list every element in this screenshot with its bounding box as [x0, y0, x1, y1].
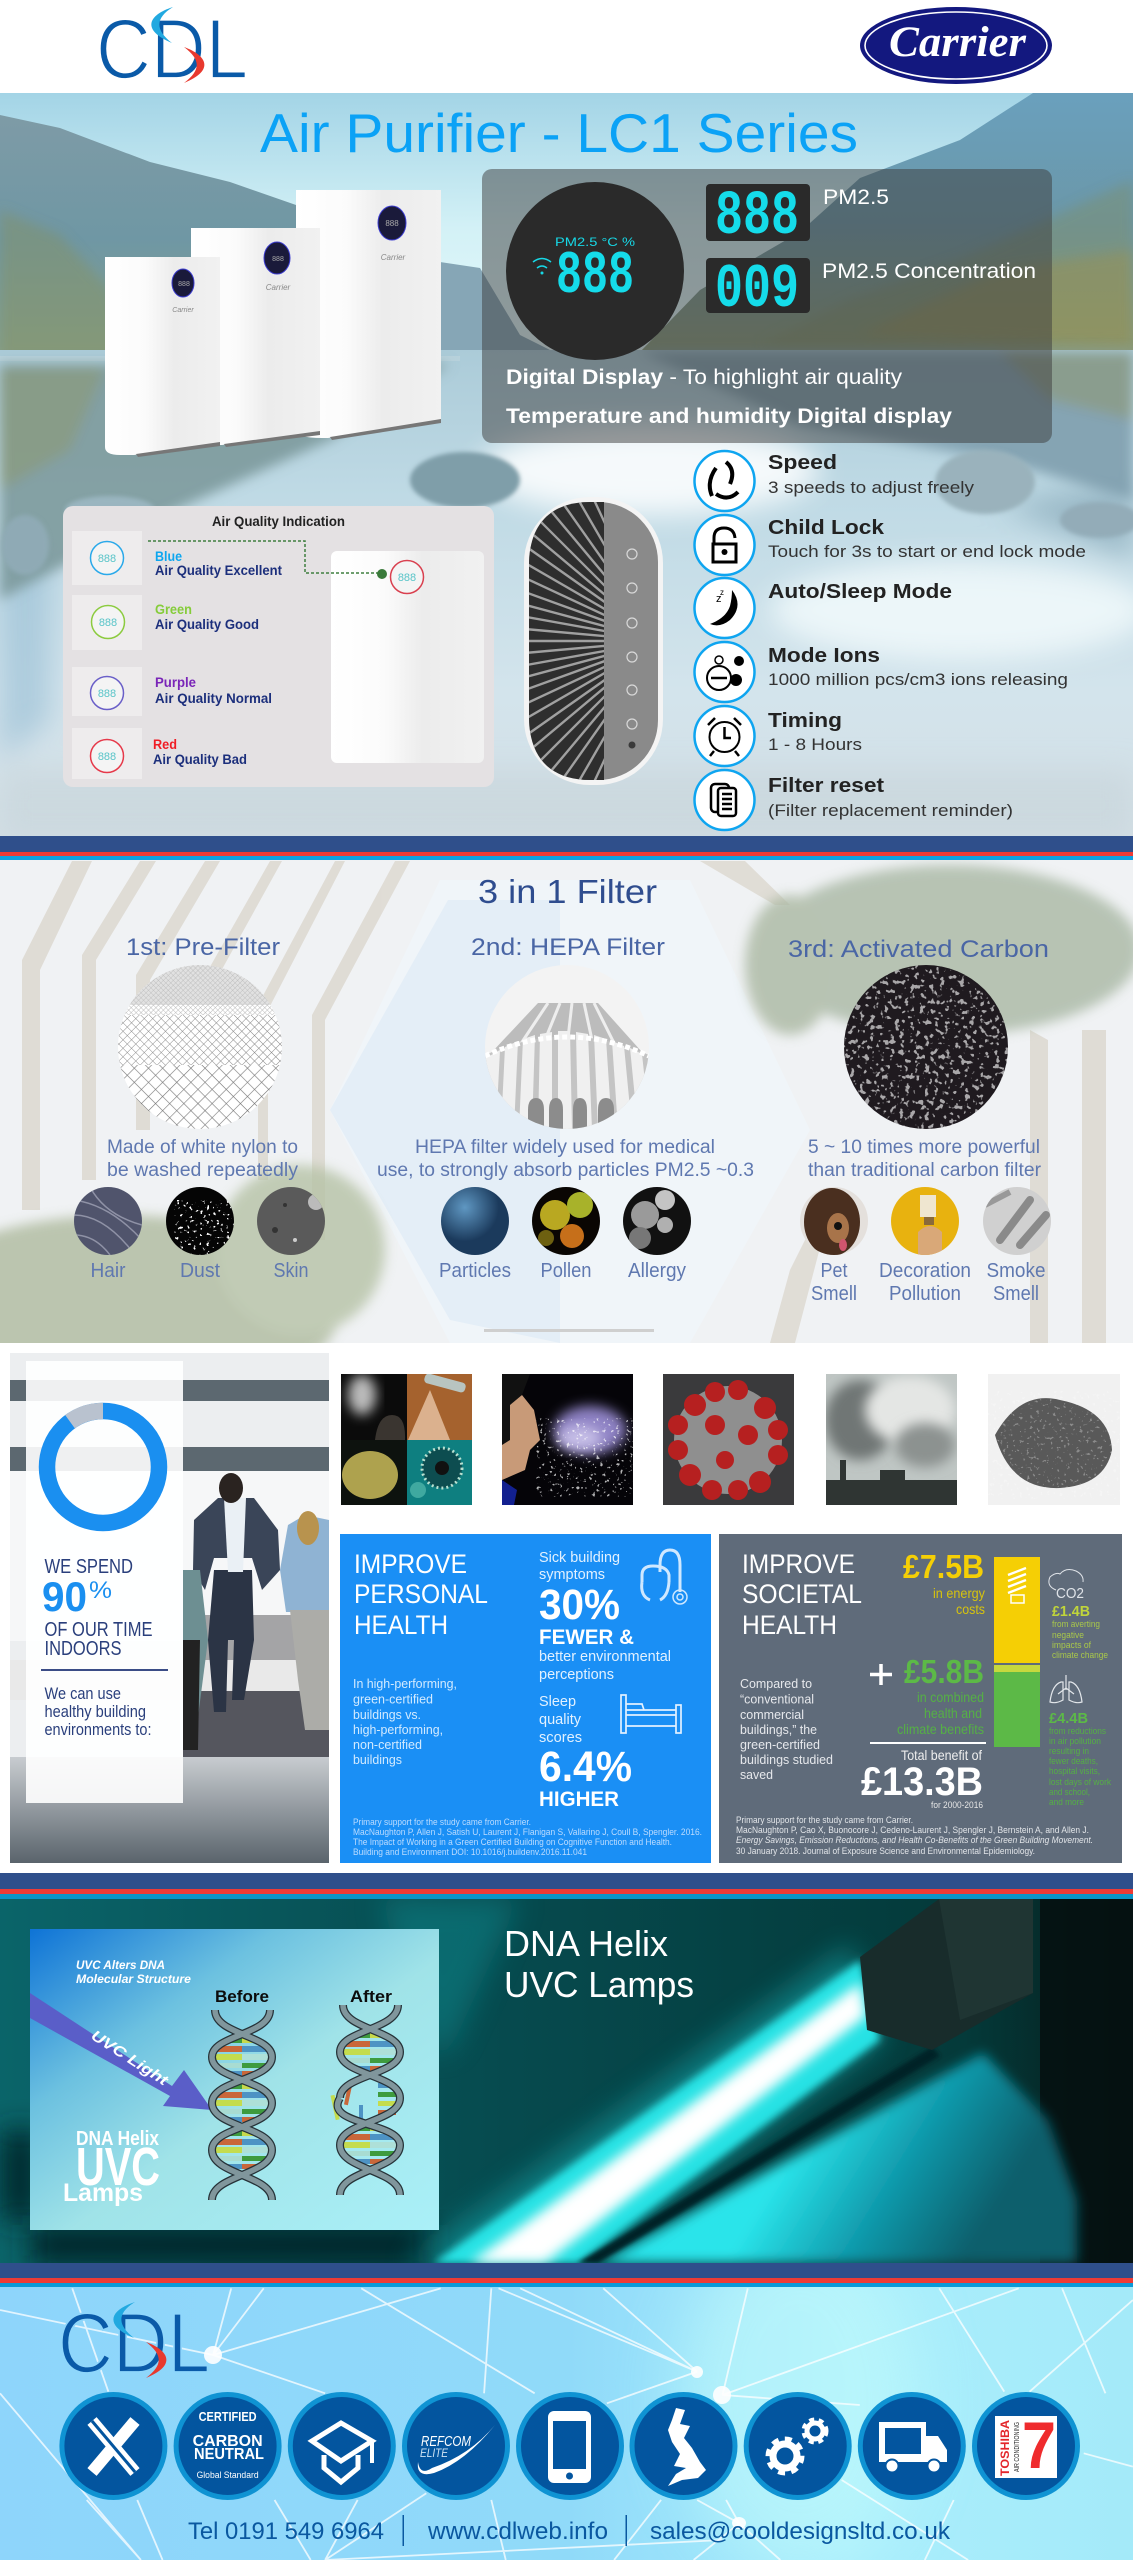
panel: improve societal health: in combined — [917, 1689, 984, 1705]
panel: improve societal health: resulting in — [1049, 1746, 1089, 1757]
icon circle: graduation cap — [288, 2392, 396, 2500]
feature: auto sleep mode — [694, 578, 952, 638]
header: Carrier logo — [860, 7, 1052, 84]
panel: improve societal health: impacts of — [1052, 1640, 1091, 1651]
panel: improve personal health: Sick building — [539, 1549, 620, 1566]
indicator: red — [90, 740, 124, 772]
feature: mode ions: 1000 million pcs/cm3 ions releasing — [768, 670, 1068, 689]
display circle: PM2.5 °C % — [555, 235, 635, 249]
panel: improve societal health: for 2000-2016 — [931, 1800, 983, 1811]
product image: three purifiers: 888 — [272, 256, 284, 263]
column: activated carbon: Pollution — [889, 1283, 961, 1305]
panel: improve societal health: £1.4B — [1052, 1604, 1090, 1620]
panel: footer background — [0, 2230, 1133, 2560]
indicator: red: 888 — [98, 751, 116, 763]
image: hair — [74, 1187, 142, 1255]
footer: CDL logo: CDL — [58, 2296, 210, 2390]
panel: improve societal health: Energy Savings, Emission Reductions, and Health Co-Benefits of the Green Building Movement. — [736, 1835, 1093, 1846]
panel: improve personal health — [340, 1534, 711, 1863]
panel: improve personal health: high-performing, — [353, 1723, 443, 1737]
panel: improve personal health: PERSONAL — [354, 1579, 488, 1609]
panel: improve personal health: FEWER & — [539, 1626, 634, 1649]
panel: improve personal health: buildings vs. — [353, 1708, 421, 1722]
column: pre-filter: Skin — [274, 1260, 308, 1282]
panel: improve personal health: Sleep — [539, 1693, 576, 1710]
feature: auto sleep mode: Auto/Sleep Mode — [768, 580, 952, 603]
heading: DNA Helix UVC Lamps: UVC Lamps — [504, 1964, 694, 2005]
small purifier with indicator — [148, 541, 484, 763]
icon circle: certified carbon neutral — [174, 2392, 282, 2500]
text: we spend 90 percent — [41, 1556, 168, 1739]
plus sign — [870, 1664, 892, 1685]
panel: improve personal health: 30% — [539, 1581, 620, 1629]
column: HEPA filter: 2nd: HEPA Filter — [471, 934, 665, 961]
photo: people walking indoors — [10, 1353, 329, 1863]
text: we spend 90 percent: environments to: — [44, 1720, 152, 1739]
panel: digital display — [482, 169, 1052, 443]
icon circle: UK map — [630, 2392, 738, 2500]
panel: improve personal health: symptoms — [539, 1566, 605, 1583]
panel: improve personal health: better environmental — [539, 1648, 671, 1665]
column: activated carbon: 3rd: Activated Carbon — [788, 936, 1049, 963]
DNA helix: after — [331, 2005, 400, 2195]
panel: improve societal health: climate benefits — [897, 1721, 984, 1737]
column: activated carbon: 5 ~ 10 times more powerful — [808, 1137, 1040, 1158]
panel: improve personal health: Building and Environment DOI: 10.1016/j.buildenv.2016.11.041 — [353, 1847, 587, 1858]
indicator: blue — [90, 542, 124, 574]
footer: contact details — [188, 2515, 951, 2546]
text: we spend 90 percent: 90 — [42, 1573, 87, 1620]
header: Carrier logo: Carrier — [889, 19, 1027, 66]
arrow: UVC light: UVC Light — [88, 2027, 172, 2090]
diagram: UVC alters DNA: After — [350, 1987, 392, 2006]
icon circle: certified carbon neutral: CARBON — [193, 2433, 263, 2450]
indicator: green — [92, 606, 124, 638]
product image: three purifiers: Carrier — [172, 307, 194, 314]
image: skin — [257, 1187, 325, 1255]
panel: improve societal health: negative — [1052, 1630, 1084, 1641]
diagram: UVC alters DNA: DNA Helix — [76, 2128, 159, 2150]
panel: air quality indication: Green — [155, 602, 192, 617]
icon circle: REFCOM Elite — [402, 2392, 510, 2500]
panel: improve societal health: SOCIETAL — [742, 1579, 862, 1609]
product image: three purifiers: 888 — [385, 219, 399, 228]
panel: digital display: Digital Display - To highlight air quality — [506, 365, 902, 389]
icon circle: certified carbon neutral: Global Standard — [197, 2470, 259, 2480]
feature: child lock: Touch for 3s to start or end lock mode — [768, 542, 1086, 561]
icon circle: certified carbon neutral: CERTIFIED — [199, 2409, 257, 2424]
icon circle: certified carbon neutral: NEUTRAL — [194, 2446, 264, 2463]
icon: bed — [621, 1695, 681, 1733]
image: pleats — [485, 965, 650, 1129]
column: pre-filter: 1st: Pre-Filter — [126, 934, 280, 961]
image: carbon granules — [844, 965, 1008, 1129]
panel: improve personal health: In high-performing, — [353, 1677, 457, 1691]
column: pre-filter: Hair — [90, 1260, 126, 1282]
panel: improve societal health: hospital visits, — [1049, 1766, 1100, 1777]
column: activated carbon: Decoration — [879, 1260, 971, 1282]
column: HEPA filter: Allergy — [628, 1260, 686, 1282]
icon circle: smartphone — [516, 2392, 624, 2500]
icon circle: delivery truck — [858, 2392, 966, 2500]
feature: child lock — [694, 515, 1086, 575]
panel: UVC lamp background — [0, 1899, 1133, 2265]
photo: coronavirus — [663, 1374, 794, 1505]
text: we spend 90 percent: INDOORS — [44, 1638, 122, 1660]
panel: improve societal health: and more — [1049, 1797, 1084, 1808]
diagram: UVC alters DNA — [30, 1929, 439, 2230]
panel: improve societal health: £4.4B — [1049, 1711, 1088, 1727]
panel: improve societal health — [719, 1534, 1122, 1863]
feature: filter reset: (Filter replacement reminder) — [768, 801, 1013, 820]
icon circle: tools — [59, 2392, 167, 2500]
indicator: purple — [90, 676, 124, 710]
panel: improve societal health: in energy — [933, 1585, 985, 1601]
panel: improve personal health: 6.4% — [539, 1743, 632, 1791]
feature: timing: 1 - 8 Hours — [768, 735, 862, 754]
heading: 3 in 1 filter: 3 in 1 Filter — [478, 873, 657, 910]
column: activated carbon: Pet — [820, 1260, 848, 1282]
panel: 3 in 1 filter background — [0, 860, 1133, 1343]
text: we spend 90 percent: OF OUR TIME — [44, 1619, 152, 1641]
diagram: UVC alters DNA: Before — [215, 1987, 269, 2006]
panel: improve societal health: lost days of work — [1049, 1777, 1111, 1788]
icon: CO2 cloud — [1049, 1570, 1084, 1602]
icon: lungs — [1050, 1675, 1082, 1703]
DNA helix: before — [212, 2010, 272, 2200]
title: Air Purifier - LC1 Series — [260, 102, 858, 164]
panel: air quality indication — [63, 506, 494, 787]
column: pre-filter: Made of white nylon to — [107, 1137, 298, 1158]
panel: air quality indication: Air Quality Excellent — [155, 563, 282, 578]
panel: improve societal health: costs — [956, 1601, 985, 1617]
feature: speed: Speed — [768, 451, 837, 474]
photo: factory smoke — [825, 1374, 957, 1505]
panel: air quality indication: Red — [153, 737, 177, 752]
panel: digital display: Temperature and humidity Digital display — [506, 404, 952, 428]
panel: air quality indication: Air Quality Normal — [155, 691, 272, 706]
footer: contact details: Tel 0191 549 6964 — [188, 2518, 384, 2545]
icon: stethoscope — [642, 1550, 687, 1604]
panel: improve personal health: HEALTH — [354, 1610, 448, 1640]
panel: air quality indication: Purple — [155, 675, 196, 690]
panel: improve societal health: buildings studied — [740, 1752, 833, 1767]
feature: speed — [694, 451, 975, 511]
column: HEPA filter: use, to strongly absorb particles PM2.5 ~0.3 — [377, 1160, 754, 1181]
column: activated carbon — [788, 936, 1051, 1305]
panel: improve societal health: IMPROVE — [742, 1549, 855, 1579]
column: HEPA filter: HEPA filter widely used for medical — [415, 1137, 715, 1158]
image: smoke — [983, 1187, 1051, 1255]
product image: three purifiers: Carrier — [266, 283, 291, 292]
panel: improve societal health: £7.5B — [903, 1548, 984, 1585]
panel: improve personal health: quality — [539, 1711, 581, 1728]
icon: CO2 cloud: CO2 — [1056, 1585, 1084, 1602]
panel: improve societal health: and school, — [1049, 1787, 1090, 1798]
panel: improve societal health: green-certified — [740, 1737, 820, 1752]
feature: auto sleep mode: z — [720, 588, 724, 597]
panel: improve personal health: HIGHER — [539, 1788, 619, 1811]
panel: air quality indication: Air Quality Good — [155, 617, 259, 632]
text: we spend 90 percent: We can use — [44, 1684, 121, 1703]
column: pre-filter: be washed repeatedly — [107, 1160, 299, 1181]
icon circle: Toshiba 7 year warranty: TOSHIBA — [998, 2420, 1012, 2476]
photo: dust pile — [988, 1374, 1120, 1505]
image: mesh — [118, 965, 282, 1130]
diagram: UVC alters DNA: Lamps — [63, 2179, 143, 2207]
panel: improve personal health: buildings — [353, 1753, 402, 1767]
heading: DNA Helix UVC Lamps: DNA Helix — [504, 1923, 668, 1964]
feature: auto sleep mode: z — [716, 593, 722, 605]
feature: speed: 3 speeds to adjust freely — [768, 478, 975, 497]
feature: mode ions: Mode Ions — [768, 644, 880, 667]
product image: three purifiers — [105, 190, 441, 457]
panel: improve personal health: non-certified — [353, 1738, 422, 1752]
panel: improve societal health: from reductions — [1049, 1726, 1106, 1737]
column: activated carbon: Smell — [993, 1283, 1039, 1305]
image: decoration — [891, 1187, 959, 1255]
divider band — [0, 2263, 1133, 2288]
photo: steam, shower, mite, virus — [341, 1373, 472, 1505]
icon circle: gears — [744, 2392, 852, 2500]
header: CDL logo: CDL — [96, 2, 248, 96]
stacked bar — [994, 1557, 1040, 1747]
panel: improve societal health: HEALTH — [742, 1610, 837, 1640]
photo: sneeze — [502, 1374, 633, 1505]
panel: air quality indication: Blue — [155, 549, 182, 564]
footer: contact details: www.cdlweb.info — [427, 2518, 608, 2545]
column: HEPA filter — [377, 934, 754, 1282]
column: activated carbon: Smoke — [986, 1260, 1046, 1282]
panel: improve societal health: £13.3B — [861, 1760, 983, 1804]
icon circle: Toshiba 7 year warranty: AIR CONDITIONING — [1014, 2422, 1021, 2472]
panel: air quality indication: Air Quality Indication — [212, 513, 345, 529]
panel: improve societal health: Total benefit of — [901, 1747, 982, 1763]
panel: improve personal health: The Impact of Working in a Green Certified Building on Cognitive Function and Health. — [353, 1837, 672, 1848]
product image: three purifiers: 888 — [178, 281, 190, 288]
diagram: UVC alters DNA: Molecular Structure — [76, 1972, 191, 1986]
hero panel: lake and mountain background — [0, 93, 1133, 840]
product image: three purifiers: Carrier — [381, 253, 406, 262]
icon circle: Toshiba 7 year warranty: 7 — [1022, 2408, 1056, 2482]
panel: improve personal health: perceptions — [539, 1666, 614, 1683]
footer: contact details: sales@cooldesignsltd.co.uk — [650, 2518, 951, 2545]
feature: mode ions — [694, 642, 1068, 702]
panel: improve societal health: health and — [924, 1705, 982, 1721]
panel: improve societal health: Compared to — [740, 1676, 812, 1691]
display circle: 888 — [556, 243, 634, 311]
panel: improve societal health: Primary support for the study came from Carrier. — [736, 1815, 913, 1826]
panel: improve societal health: “conventional — [740, 1692, 814, 1706]
divider band — [0, 836, 1133, 861]
arrow: UVC light — [30, 1993, 212, 2110]
indicator: blue: 888 — [98, 553, 116, 565]
panel: air quality indication: Air Quality Bad — [153, 752, 247, 767]
panel: improve personal health: scores — [539, 1729, 582, 1746]
panel: improve societal health: buildings,” the — [740, 1722, 817, 1737]
panel: improve personal health: MacNaughton P, Allen J, Satish U, Laurent J, Flanigan S, Vallarino J, Coull B, Spengler. 2016. — [353, 1827, 702, 1838]
panel: improve personal health: Primary support for the study came from Carrier. — [353, 1817, 531, 1828]
panel: improve societal health: saved — [740, 1767, 773, 1782]
feature: child lock: Child Lock — [768, 516, 885, 539]
icon circle: REFCOM Elite: REFCOM — [421, 2433, 471, 2450]
panel: improve societal health: MacNaughton P, Cao X, Buonocore J, Cedeno-Laurent J, Spengler J, Bernstein A, and Allen J. — [736, 1825, 1089, 1836]
panel: improve societal health: in air pollution — [1049, 1736, 1101, 1747]
image: dust — [166, 1187, 234, 1255]
feature: timing: Timing — [768, 709, 842, 732]
image: pollen — [532, 1187, 600, 1255]
product image: purifier filter front — [524, 498, 663, 785]
PM2.5 readout: 888 — [715, 181, 799, 252]
panel: digital display: PM2.5 — [823, 186, 889, 209]
feature: timing — [694, 706, 862, 766]
image: particles — [441, 1187, 509, 1255]
feature: filter reset — [694, 770, 1013, 830]
image: pet — [800, 1187, 868, 1256]
display circle — [506, 182, 684, 360]
diagram: UVC alters DNA: UVC — [76, 2137, 160, 2197]
column: HEPA filter: Pollen — [540, 1260, 592, 1282]
small purifier with indicator: 888 — [398, 572, 416, 584]
icon circle: Toshiba 7 year warranty — [972, 2392, 1080, 2500]
diagram: UVC alters DNA: UVC Alters DNA — [76, 1958, 165, 1972]
indicator: purple: 888 — [98, 688, 116, 700]
image: allergy — [623, 1187, 691, 1255]
column: pre-filter — [74, 934, 325, 1282]
panel: improve personal health: IMPROVE — [354, 1549, 467, 1579]
column: pre-filter: Dust — [180, 1260, 220, 1282]
donut chart: 90 percent — [47, 1411, 159, 1523]
panel: improve societal health: climate change — [1052, 1650, 1108, 1661]
panel: digital display: PM2.5 Concentration — [822, 260, 1036, 283]
panel: improve societal health: fewer deaths, — [1049, 1756, 1098, 1767]
text: we spend 90 percent: % — [89, 1577, 112, 1604]
column: activated carbon: than traditional carbon filter — [808, 1160, 1042, 1181]
panel: improve personal health: green-certified — [353, 1692, 433, 1706]
panel: improve societal health: £5.8B — [904, 1653, 984, 1690]
divider band — [0, 1873, 1133, 1899]
feature: filter reset: Filter reset — [768, 774, 884, 797]
text: we spend 90 percent: healthy building — [44, 1702, 146, 1721]
panel: improve societal health: 30 January 2018. Journal of Exposure Science and Environmental Epidemiology. — [736, 1846, 1035, 1857]
PM2.5 Concentration readout: 009 — [715, 254, 799, 325]
panel: improve societal health: commercial — [740, 1707, 804, 1722]
indicator: green: 888 — [99, 617, 117, 629]
heading: DNA Helix UVC Lamps — [504, 1923, 694, 2005]
column: HEPA filter: Particles — [439, 1260, 511, 1282]
icon circle: REFCOM Elite: ELITE — [420, 2446, 449, 2460]
panel: improve societal health: from averting — [1052, 1619, 1100, 1630]
column: activated carbon: Smell — [811, 1283, 857, 1305]
text: we spend 90 percent: WE SPEND — [44, 1556, 133, 1578]
